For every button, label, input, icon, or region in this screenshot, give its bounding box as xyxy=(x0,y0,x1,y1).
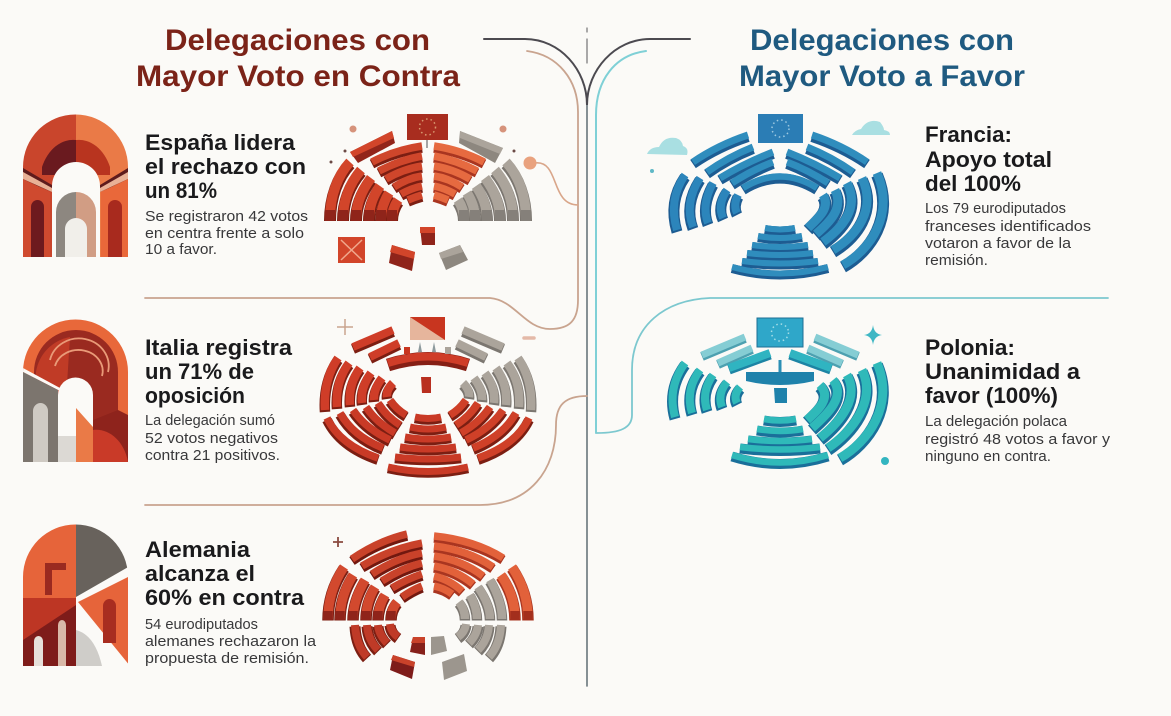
icon: España arch xyxy=(23,110,128,260)
text: Italia detail: 52 votos negativos xyxy=(145,431,278,447)
text: España detail: Se registraron 42 votos xyxy=(145,209,308,225)
heading: Polonia xyxy=(925,335,1081,408)
icon: flag xyxy=(407,114,448,148)
icon: split flag xyxy=(410,317,445,352)
chart: Francia hemicycle xyxy=(647,114,890,275)
icon: minus sign xyxy=(524,336,534,340)
text: Francia detail: votaron a favor de la xyxy=(925,236,1072,252)
text: Italia detail: contra 21 positivos. xyxy=(145,448,280,464)
heading: Francia xyxy=(925,122,1052,196)
icon: EU flag xyxy=(758,114,803,143)
title: against xyxy=(136,24,460,93)
heading: España: el rechazo con xyxy=(145,154,306,179)
connector lines xyxy=(145,28,1108,686)
heading: Italia: oposición xyxy=(145,383,245,408)
text: Alemania detail: alemanes rechazaron la xyxy=(145,634,317,650)
title: in favour: Mayor Voto a Favor xyxy=(739,60,1025,93)
text: España detail: 10 a favor. xyxy=(145,242,217,258)
title: against: Mayor Voto en Contra xyxy=(136,60,460,93)
text: Alemania detail xyxy=(145,617,317,667)
icon: crossed square xyxy=(338,237,365,263)
icon: clouds xyxy=(647,121,890,173)
text: España detail: en centra frente a solo xyxy=(145,226,304,242)
icon: plus sign xyxy=(337,319,353,335)
panel: Alemania xyxy=(23,520,528,680)
chart: Italia hemicycle xyxy=(325,317,534,473)
heading: España xyxy=(145,130,306,203)
panel: España xyxy=(23,110,536,271)
icon: Alemania arch xyxy=(23,520,130,668)
text: Francia detail: franceses identificados xyxy=(925,219,1091,235)
icon: sparkle xyxy=(864,325,882,345)
heading: Italia: Italia registra xyxy=(145,335,293,360)
icon: EU flag xyxy=(757,318,803,347)
heading: Italia: un 71% de xyxy=(145,359,254,384)
heading: Polonia: Polonia: xyxy=(925,335,1015,360)
text: Francia detail: remisión. xyxy=(925,253,988,269)
panel: Italia xyxy=(23,315,534,473)
title: against: Delegaciones con xyxy=(165,24,430,57)
chart: Polonia hemicycle xyxy=(673,318,889,465)
heading: Alemania: 60% en contra xyxy=(145,585,305,610)
text: Francia detail xyxy=(925,201,1091,269)
text: Alemania detail: propuesta de remisión. xyxy=(145,651,309,667)
text: Alemania detail: 54 eurodiputados xyxy=(145,617,258,633)
text: Polonia detail xyxy=(925,414,1111,465)
heading: Francia: Francia: xyxy=(925,122,1012,147)
text: Polonia detail: ninguno en contra. xyxy=(925,449,1051,465)
heading: Italia xyxy=(145,335,293,408)
panel: Polonia xyxy=(673,318,1111,465)
chart: Alemania hemicycle xyxy=(328,534,528,680)
chart: España hemicycle xyxy=(330,114,536,271)
icon: teal dot xyxy=(881,457,889,465)
heading: Alemania: alcanza el xyxy=(145,561,255,586)
heading: Polonia: favor (100%) xyxy=(925,383,1058,408)
text: Polonia detail: registró 48 votos a favor y xyxy=(925,432,1111,448)
text: Francia detail: Los 79 eurodiputados xyxy=(925,201,1066,217)
heading: España: España lidera xyxy=(145,130,296,155)
text: Italia detail: La delegación sumó xyxy=(145,413,275,429)
heading: Francia: del 100% xyxy=(925,171,1021,196)
heading: Alemania xyxy=(145,537,305,610)
icon: Italia arch xyxy=(23,315,128,470)
title: in favour xyxy=(739,24,1025,93)
text: Italia detail xyxy=(145,413,280,464)
title: in favour: Delegaciones con xyxy=(750,24,1014,57)
text: España detail xyxy=(145,209,308,258)
heading: Alemania: Alemania xyxy=(145,537,251,562)
heading: Francia: Apoyo total xyxy=(925,147,1052,172)
heading: España: un 81% xyxy=(145,178,217,203)
heading: Polonia: Unanimidad a xyxy=(925,359,1081,384)
icon: small plus xyxy=(333,537,343,547)
panel: Francia xyxy=(647,114,1091,275)
text: Polonia detail: La delegación polaca xyxy=(925,414,1068,430)
